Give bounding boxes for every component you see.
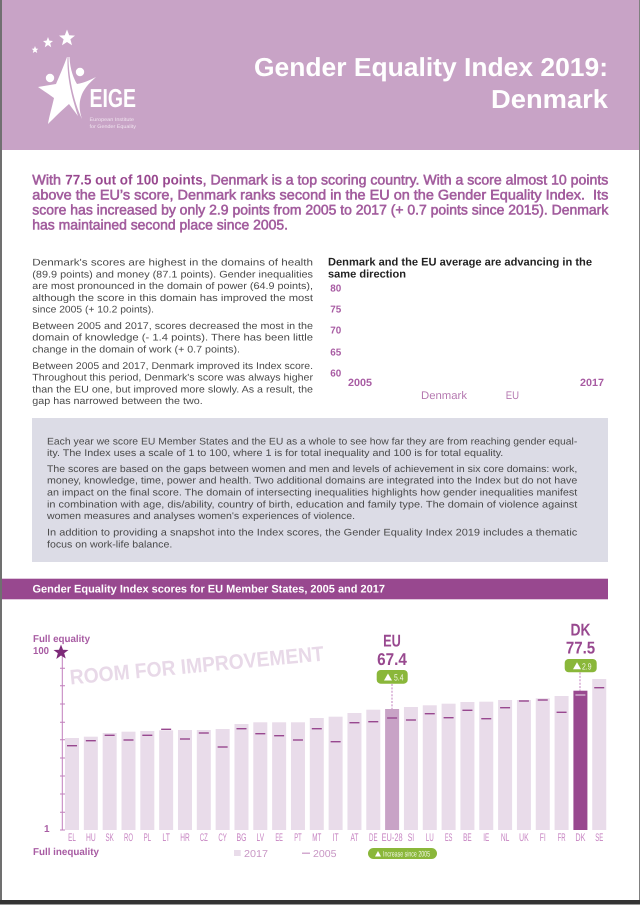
bar: HR bbox=[178, 730, 192, 844]
icon: full equality star bbox=[54, 644, 68, 659]
chart heading: same direction bbox=[328, 269, 406, 281]
bar: IT: IT bbox=[333, 832, 339, 844]
chart legend bbox=[421, 390, 519, 402]
bar: ES: ES bbox=[445, 832, 452, 844]
callout: DK score: DK bbox=[570, 621, 591, 640]
y axis labels: 60 bbox=[330, 369, 342, 380]
bar: RO bbox=[121, 732, 135, 844]
y axis labels bbox=[330, 284, 342, 380]
axis labels: 1 bbox=[44, 824, 50, 835]
lead paragraph: score has increased by only 2.9 points from 2005 to 2017 (+ 0.7 points since 2015). Denmark bbox=[32, 201, 609, 217]
body text: domain scores: since 2005 (+ 10.2 points). bbox=[32, 305, 154, 316]
bar: SK: SK bbox=[106, 832, 114, 844]
body text: domain scores: are most pronounced in the domain of power (64.9 points), bbox=[32, 281, 313, 292]
axis labels: Full equality bbox=[33, 634, 90, 645]
y axis labels: 80 bbox=[330, 284, 342, 295]
bar: SE: SE bbox=[595, 832, 603, 844]
bar: FR: FR bbox=[558, 832, 566, 844]
bar: CY bbox=[216, 729, 230, 844]
panel: about the Index: women measures and analyses women's experiences of violence. bbox=[46, 511, 355, 522]
bar: EL bbox=[65, 738, 79, 844]
header banner bbox=[2, 0, 639, 150]
bar: SI: SI bbox=[408, 832, 414, 844]
bar: HR: HR bbox=[180, 832, 190, 844]
bar: FR bbox=[555, 696, 569, 844]
bar: LV bbox=[253, 722, 267, 844]
panel: about the Index: in combination with age, dis/ability, country of birth, education and family type. The domain of violence against bbox=[47, 499, 578, 510]
panel: about the Index: focus on work-life balance. bbox=[47, 539, 172, 550]
bar: MT bbox=[310, 718, 324, 844]
bar: CY: CY bbox=[218, 832, 227, 844]
callout: EU score: 67.4 bbox=[377, 650, 407, 669]
bar: PL: PL bbox=[144, 832, 151, 844]
panel: about the Index: ity. The Index uses a scale of 1 to 100, where 1 is for total inequality and 100 is for total equality. bbox=[47, 448, 503, 459]
legend bbox=[234, 848, 437, 860]
bar: LU: LU bbox=[426, 832, 434, 844]
bar: BE bbox=[460, 702, 474, 844]
chart heading: Denmark and the EU average are advancing in the bbox=[328, 256, 592, 268]
bar: EE bbox=[272, 722, 286, 844]
axis labels bbox=[33, 634, 99, 858]
bar: PL bbox=[140, 731, 154, 844]
bar: ES bbox=[442, 704, 456, 844]
bar: HU bbox=[84, 737, 98, 844]
x axis labels: 2017 bbox=[580, 377, 604, 389]
bar: HU: HU bbox=[86, 832, 96, 844]
body text: domain scores: Denmark's scores are highest in the domains of health bbox=[32, 258, 313, 269]
body text: domain scores: Between 2005 and 2017, scores decreased the most in the bbox=[32, 321, 313, 332]
title: Denmark bbox=[491, 84, 609, 114]
bar: CZ bbox=[197, 730, 211, 844]
bar: LV: LV bbox=[257, 832, 264, 844]
section banner: bar chart title: Gender Equality Index scores for EU Member States, 2005 and 2017 bbox=[32, 584, 385, 596]
bar: IE: IE bbox=[483, 832, 489, 844]
panel: about the Index: The scores are based on the gaps between women and men and levels of achievement in six core domains: work, bbox=[47, 464, 577, 475]
bar: SK bbox=[103, 733, 117, 844]
bar: FI bbox=[536, 698, 550, 844]
bar: NL bbox=[498, 700, 512, 844]
bar: LU bbox=[423, 705, 437, 844]
bar: BG bbox=[234, 724, 248, 844]
bar: NL: NL bbox=[501, 832, 509, 844]
logo: EIGE: for Gender Equality bbox=[90, 124, 137, 130]
bar: UK: UK bbox=[519, 832, 529, 844]
panel: about the Index: Each year we score EU Member States and the EU as a whole to see how far they are from reaching gender equal- bbox=[47, 436, 577, 447]
line chart: Denmark and the EU average bbox=[328, 256, 604, 402]
y axis labels: 65 bbox=[330, 348, 342, 359]
title bbox=[254, 52, 609, 114]
panel: about the Index: In addition to providing a snapshot into the Index scores, the Gender Equality Index 2019 includes a thematic bbox=[47, 528, 577, 539]
logo: EIGE: EIGE bbox=[90, 83, 136, 113]
bar: PT: PT bbox=[294, 832, 302, 844]
axis labels: Full inequality bbox=[33, 847, 99, 858]
legend: 2005 bbox=[313, 849, 337, 860]
axis labels: 100 bbox=[33, 646, 49, 657]
chart legend: EU bbox=[506, 390, 519, 402]
bar: MT: MT bbox=[312, 832, 321, 844]
bar: SI bbox=[404, 707, 418, 844]
bar: LT bbox=[159, 729, 173, 844]
logo: EIGE bbox=[32, 30, 137, 130]
bar: AT: AT bbox=[350, 832, 359, 844]
y axis labels: 75 bbox=[330, 305, 342, 316]
body text: domain scores: gap has narrowed between the two. bbox=[32, 396, 203, 407]
panel: about the Index bbox=[32, 418, 608, 562]
callout: EU score bbox=[377, 632, 408, 709]
chart heading bbox=[328, 256, 592, 281]
callout: DK score: 2.9 bbox=[582, 661, 592, 671]
bar: DK: DK bbox=[575, 832, 586, 844]
chart legend: Denmark bbox=[421, 390, 468, 402]
x axis labels: 2005 bbox=[348, 377, 372, 389]
body text: domain scores: Between 2005 and 2017, Denmark improved its Index score. bbox=[32, 361, 313, 372]
x axis labels bbox=[348, 377, 604, 389]
logo: EIGE: European Institute bbox=[90, 117, 134, 123]
bar: RO: RO bbox=[124, 832, 133, 844]
bar: AT bbox=[347, 713, 361, 844]
bar: FI: FI bbox=[540, 832, 546, 844]
y axis labels: 70 bbox=[330, 326, 342, 337]
watermark: room for improvement: ROOM FOR IMPROVEMENT bbox=[69, 643, 325, 689]
callout: DK score bbox=[565, 621, 597, 691]
bar: IT bbox=[329, 717, 343, 844]
body text: domain scores bbox=[32, 258, 314, 407]
legend: increase since 2005: Increase since 2005 bbox=[383, 849, 430, 858]
bar: DE bbox=[366, 710, 380, 844]
lead paragraph: above the EU’s score, Denmark ranks second in the EU on the Gender Equality Index. Its bbox=[32, 186, 608, 202]
bar: PT bbox=[291, 722, 305, 844]
bar: BG: BG bbox=[236, 832, 246, 844]
bar: IE bbox=[479, 702, 493, 844]
legend: increase since 2005 bbox=[368, 848, 437, 859]
y axis bbox=[60, 650, 65, 830]
bar: EE: EE bbox=[275, 832, 283, 844]
bar: DE: DE bbox=[369, 832, 378, 844]
bar: UK bbox=[517, 700, 531, 844]
lead paragraph: has maintained second place since 2005. bbox=[32, 216, 288, 232]
bar: LT: LT bbox=[162, 832, 170, 844]
body text: domain scores: although the score in this domain has improved the most bbox=[32, 293, 313, 304]
lead paragraph: 77.5 out of 100 points bbox=[65, 171, 203, 187]
body text: domain scores: domain of knowledge (- 1.4 points). There has been little bbox=[32, 333, 313, 344]
bar: EU-28: EU-28 bbox=[382, 832, 403, 844]
bar: CZ: CZ bbox=[200, 832, 208, 844]
legend: 2017 bbox=[244, 849, 268, 860]
body text: domain scores: (89.9 points) and money (87.1 points). Gender inequalities bbox=[32, 270, 313, 281]
panel: about the Index: money, knowledge, time, power and health. Two additional domains are integrated into the Index but do not have bbox=[47, 476, 577, 487]
body text: domain scores: change in the domain of work (+ 0.7 points). bbox=[32, 345, 240, 356]
lead paragraph: With bbox=[32, 171, 61, 187]
title: Gender Equality Index 2019: bbox=[254, 52, 608, 82]
bar chart: Index scores by country bbox=[33, 621, 606, 860]
section banner: bar chart title bbox=[2, 579, 608, 599]
lead paragraph: , Denmark is a top scoring country. With a score almost 10 points bbox=[203, 171, 608, 187]
body text: domain scores: than the EU one, but improved more slowly. As a result, the bbox=[32, 384, 313, 395]
callout: DK score: 77.5 bbox=[566, 639, 595, 658]
panel: about the Index: an impact on the final score. The domain of intersecting inequalities highlights how gender inequalities manifest bbox=[47, 487, 578, 498]
bar: SE bbox=[592, 679, 606, 844]
bar: EU-28 bbox=[382, 709, 403, 844]
bar: BE: BE bbox=[463, 832, 472, 844]
lead paragraph bbox=[32, 171, 609, 232]
callout: EU score: EU bbox=[383, 632, 401, 651]
callout: EU score: 5.4 bbox=[394, 672, 404, 682]
bar: EL: EL bbox=[68, 832, 76, 844]
body text: domain scores: Throughout this period, Denmark's score was always higher bbox=[32, 373, 314, 384]
bar: DK bbox=[573, 691, 587, 844]
